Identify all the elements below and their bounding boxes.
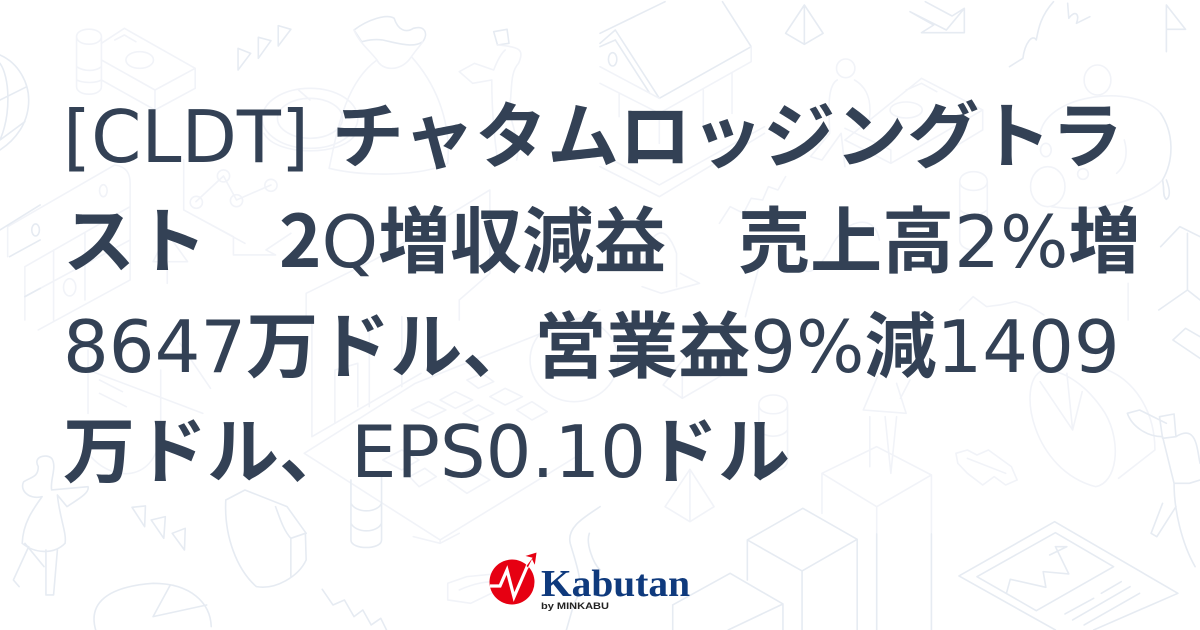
tagline: by MINKABU <box>541 601 609 612</box>
book <box>845 78 983 167</box>
title line 1: [CLDT] チャタムロッジングトラ <box>63 78 1123 183</box>
pyramid <box>786 5 823 44</box>
person with flag <box>459 29 521 160</box>
coin stack <box>960 172 987 250</box>
pyramid <box>665 469 714 522</box>
title line 3: 8647万ドル、営業益9%減1409 <box>63 288 1120 393</box>
key <box>566 507 600 630</box>
woman <box>13 456 88 595</box>
piggy bank <box>1031 65 1171 208</box>
chart document <box>959 522 1178 630</box>
line chart hexagon <box>153 160 490 320</box>
title <box>63 78 1140 498</box>
person seated <box>810 59 870 167</box>
calculator <box>88 310 600 543</box>
wordmark: Kabutan <box>541 563 690 605</box>
triangles <box>238 26 291 70</box>
tablet <box>0 165 130 330</box>
title line 4: 万ドル、EPS0.10ドル <box>63 393 790 498</box>
coins and banknote <box>77 28 195 110</box>
tall bar <box>822 447 931 630</box>
rising line <box>642 177 879 317</box>
title line 2: スト 2Q増収減益 売上高2%増 <box>63 183 1140 288</box>
money bag <box>329 17 448 174</box>
coins <box>663 353 788 471</box>
triangles <box>132 506 185 550</box>
big coin <box>1030 367 1155 487</box>
dollar sign <box>448 573 505 603</box>
small bar <box>673 573 783 630</box>
wallet ring <box>530 318 618 402</box>
gauge <box>262 88 358 151</box>
calculator right key <box>1173 328 1200 358</box>
pie chart <box>94 583 211 630</box>
bank building <box>600 2 765 197</box>
woman on bar <box>863 377 910 473</box>
man <box>1127 410 1200 567</box>
boxes and right cube <box>960 227 1200 320</box>
shield <box>226 490 306 587</box>
logo: Kabutan by MINKABU <box>490 552 690 612</box>
mid bar <box>747 508 857 630</box>
arrow <box>910 2 964 33</box>
coin stack lower <box>351 477 382 547</box>
dollar <box>956 450 1017 485</box>
zigzag <box>322 589 387 630</box>
icon: red circle with rising arrow <box>490 552 537 604</box>
piggy tail and flag <box>1009 2 1186 67</box>
globe <box>0 55 29 150</box>
